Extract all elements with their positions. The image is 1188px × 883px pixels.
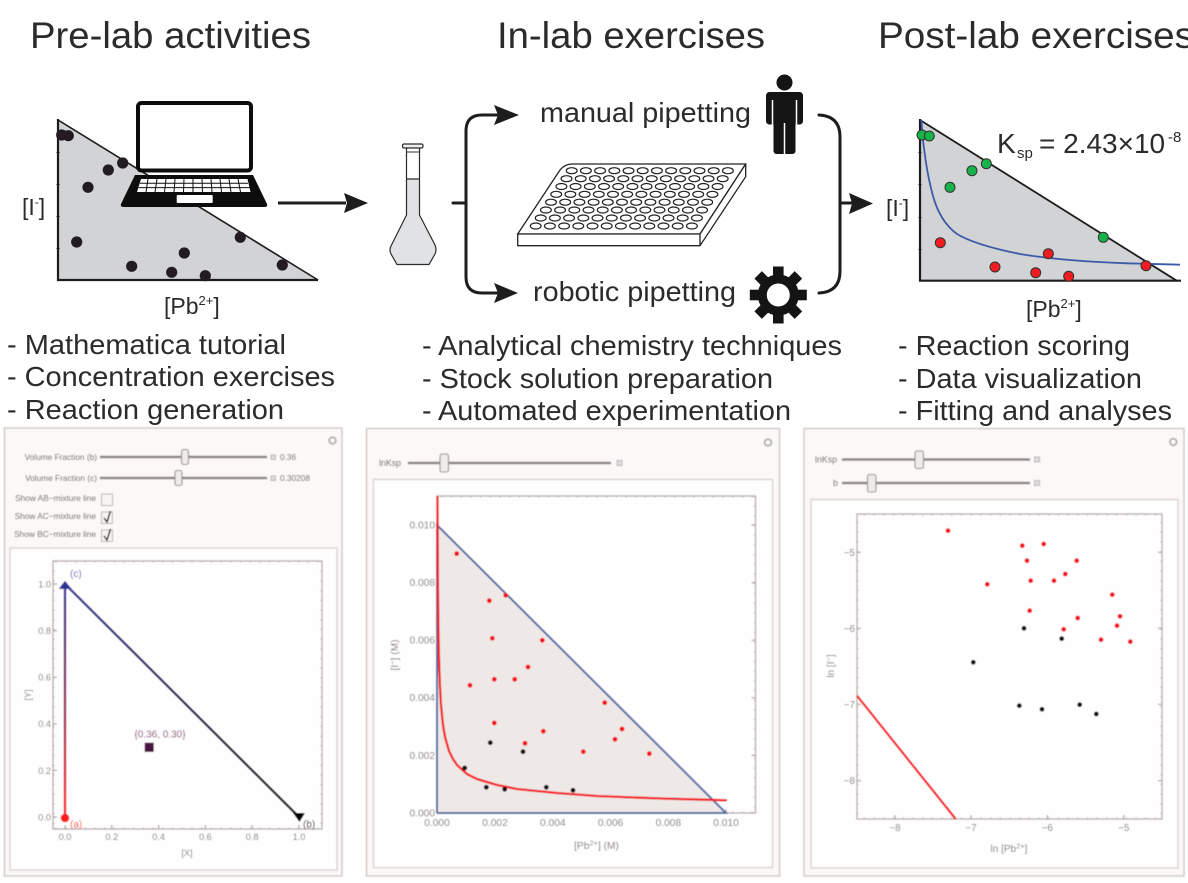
axis label: iodide left: - bbox=[35, 195, 39, 209]
chart: precipitation region: 0.008 bbox=[410, 578, 435, 589]
list: post-lab bullets: - Reaction scoring bbox=[898, 330, 1130, 361]
chart: ln I versus ln Pb: −8 bbox=[844, 776, 856, 787]
checkboxes: mixture lines: Show BC−mixture line bbox=[14, 529, 96, 539]
axis label: iodide right: [I bbox=[886, 195, 899, 221]
chart: ln I versus ln Pb: − bbox=[824, 657, 833, 662]
chart: precipitation region: 0.002 bbox=[410, 751, 435, 762]
axis label: lead right: ] bbox=[1075, 296, 1082, 322]
slider: lnKsp fit bbox=[815, 451, 1040, 468]
chart: composition triangle: [Y] bbox=[23, 689, 33, 701]
chart: precipitation region: 2+ bbox=[589, 838, 599, 848]
checkboxes: mixture lines: Show AC−mixture line bbox=[15, 511, 96, 521]
chart: pre-lab triangle with black points bbox=[56, 119, 318, 281]
chart: precipitation region: [I bbox=[390, 665, 401, 670]
chart: precipitation region: ] (M) bbox=[390, 640, 401, 660]
slider: volume fraction b bbox=[25, 450, 297, 464]
chart: ln I versus ln Pb: −5 bbox=[1118, 823, 1130, 834]
chart: precipitation region: [Pb bbox=[574, 841, 589, 852]
chart: precipitation region: 0.008 bbox=[656, 818, 681, 829]
chart: ln I versus ln Pb: −7 bbox=[844, 700, 855, 711]
chart: precipitation region: 0.004 bbox=[540, 818, 566, 829]
list: post-lab bullets bbox=[898, 330, 1172, 426]
chart: composition triangle: [X] bbox=[181, 848, 193, 858]
chart: composition triangle: 1.0 bbox=[38, 580, 51, 590]
text: Ksp value: -8 bbox=[1168, 129, 1181, 146]
chart: composition triangle: {0.36, 0.30} bbox=[134, 730, 186, 740]
checkboxes: mixture lines bbox=[14, 493, 112, 542]
axis label: lead left: ] bbox=[213, 293, 220, 319]
chart: ln I versus ln Pb: ln [Pb bbox=[991, 844, 1016, 855]
chart: composition triangle: 0.4 bbox=[38, 719, 51, 729]
list: pre-lab bullets bbox=[7, 329, 335, 425]
slider: volume fraction c: Volume Fraction (c) bbox=[25, 473, 97, 483]
chart: composition triangle: 0.8 bbox=[246, 832, 259, 842]
title: Pre-lab activities: Pre-lab activities bbox=[30, 15, 311, 56]
chart: composition triangle: 0.4 bbox=[152, 832, 165, 842]
arrow: split branch to manual and robotic pipetting bbox=[453, 105, 519, 303]
text: Ksp value: sp bbox=[1017, 145, 1033, 162]
list: pre-lab bullets: - Reaction generation bbox=[7, 394, 284, 425]
chart: composition triangle: 0.2 bbox=[38, 766, 51, 776]
icon: person bbox=[766, 74, 804, 155]
title: Post-lab exercises: Post-lab exercises bbox=[878, 15, 1188, 56]
chart: composition triangle: (a) bbox=[70, 820, 82, 830]
chart: post-lab triangle with fit bbox=[917, 119, 1181, 281]
panel: log-log fit bbox=[804, 428, 1184, 876]
list: in-lab bullets: - Automated experimentation bbox=[422, 395, 791, 426]
chart: precipitation region: 0.004 bbox=[410, 693, 435, 704]
chart: precipitation region: − bbox=[388, 660, 397, 665]
slider: volume fraction c bbox=[25, 470, 310, 486]
icon: laptop bbox=[121, 103, 267, 207]
chart: precipitation region: 0.006 bbox=[410, 636, 435, 646]
slider: volume fraction b: Volume Fraction (b) bbox=[25, 452, 97, 462]
text: Ksp value: = 2.43×10 bbox=[1039, 128, 1165, 159]
text: manual pipetting: manual pipetting bbox=[540, 97, 751, 128]
chart: composition triangle: 0.8 bbox=[38, 626, 51, 636]
list: post-lab bullets: - Data visualization bbox=[898, 363, 1142, 394]
slider: b bbox=[833, 474, 1040, 492]
chart: ln I versus ln Pb: 2+ bbox=[1016, 842, 1025, 850]
chart: ln I versus ln Pb bbox=[824, 514, 1162, 855]
panel: solubility plot bbox=[366, 428, 780, 876]
chart: precipitation region: 0.006 bbox=[598, 818, 624, 829]
chart: composition triangle: 0.6 bbox=[199, 832, 212, 842]
list: pre-lab bullets: - Concentration exercises bbox=[7, 361, 335, 392]
title: In-lab exercises: In-lab exercises bbox=[497, 15, 765, 56]
chart: precipitation region: 0.010 bbox=[713, 818, 739, 829]
chart: ln I versus ln Pb: ] bbox=[826, 654, 837, 657]
slider: lnKsp bbox=[379, 454, 622, 472]
chart: composition triangle: (b) bbox=[303, 820, 315, 830]
axis label: lead right: [Pb bbox=[1026, 296, 1061, 322]
axis label: iodide left: ] bbox=[39, 194, 45, 220]
list: post-lab bullets: - Fitting and analyses bbox=[898, 395, 1172, 426]
axis label: lead right: 2+ bbox=[1061, 296, 1075, 311]
axis label: lead left: [Pb bbox=[164, 293, 199, 319]
chart: ln I versus ln Pb: ln [I bbox=[826, 662, 837, 678]
slider: b: b bbox=[833, 478, 838, 488]
axis label: iodide right: - bbox=[899, 196, 903, 210]
list: in-lab bullets: - Stock solution preparation bbox=[422, 363, 773, 394]
list: in-lab bullets bbox=[422, 330, 842, 426]
chart: composition triangle: 1.0 bbox=[293, 832, 305, 842]
chart: precipitation region: 0.000 bbox=[410, 808, 435, 820]
chart: precipitation region: 0.000 bbox=[424, 818, 450, 829]
chart: ln I versus ln Pb: −8 bbox=[889, 823, 901, 834]
arrow: merge to post-lab bbox=[819, 115, 873, 293]
checkboxes: mixture lines: Show AB−mixture line bbox=[15, 493, 96, 503]
slider: lnKsp fit: lnKsp bbox=[815, 454, 837, 464]
icon: 96-well plate bbox=[518, 164, 746, 246]
panel: mixture line explorer bbox=[4, 428, 342, 876]
chart: precipitation region: 0.002 bbox=[482, 818, 508, 829]
list: pre-lab bullets: - Mathematica tutorial bbox=[7, 329, 286, 360]
text: Ksp value: K bbox=[997, 128, 1016, 159]
chart: composition triangle: 0.2 bbox=[105, 832, 118, 842]
slider: lnKsp: lnKsp bbox=[379, 458, 401, 468]
icon: gear bbox=[750, 266, 807, 324]
chart: composition triangle: (c) bbox=[70, 569, 82, 580]
chart: ln I versus ln Pb: −5 bbox=[844, 548, 856, 559]
chart: composition triangle bbox=[23, 561, 322, 858]
text: robotic pipetting: robotic pipetting bbox=[533, 276, 736, 307]
icon: volumetric flask bbox=[390, 144, 436, 264]
axis label: iodide right: ] bbox=[903, 195, 909, 221]
chart: precipitation region bbox=[388, 496, 756, 852]
list: in-lab bullets: - Analytical chemistry techniques bbox=[422, 330, 842, 361]
chart: composition triangle: 0.6 bbox=[38, 672, 51, 682]
axis label: iodide left: [I bbox=[22, 194, 35, 220]
chart: composition triangle: 0.0 bbox=[59, 832, 71, 842]
chart: composition triangle: 0.0 bbox=[38, 812, 51, 822]
chart: precipitation region: 0.010 bbox=[410, 520, 435, 532]
chart: ln I versus ln Pb: −6 bbox=[1042, 823, 1053, 834]
chart: ln I versus ln Pb: ] bbox=[1025, 844, 1028, 855]
chart: ln I versus ln Pb: −7 bbox=[965, 823, 977, 834]
axis label: lead left: 2+ bbox=[199, 293, 213, 308]
arrow: pre-lab to flask bbox=[278, 193, 368, 213]
slider: volume fraction b: 0.36 bbox=[280, 452, 297, 462]
chart: precipitation region: ] (M) bbox=[598, 841, 619, 852]
chart: ln I versus ln Pb: −6 bbox=[844, 624, 856, 635]
slider: volume fraction c: 0.30208 bbox=[280, 473, 310, 483]
